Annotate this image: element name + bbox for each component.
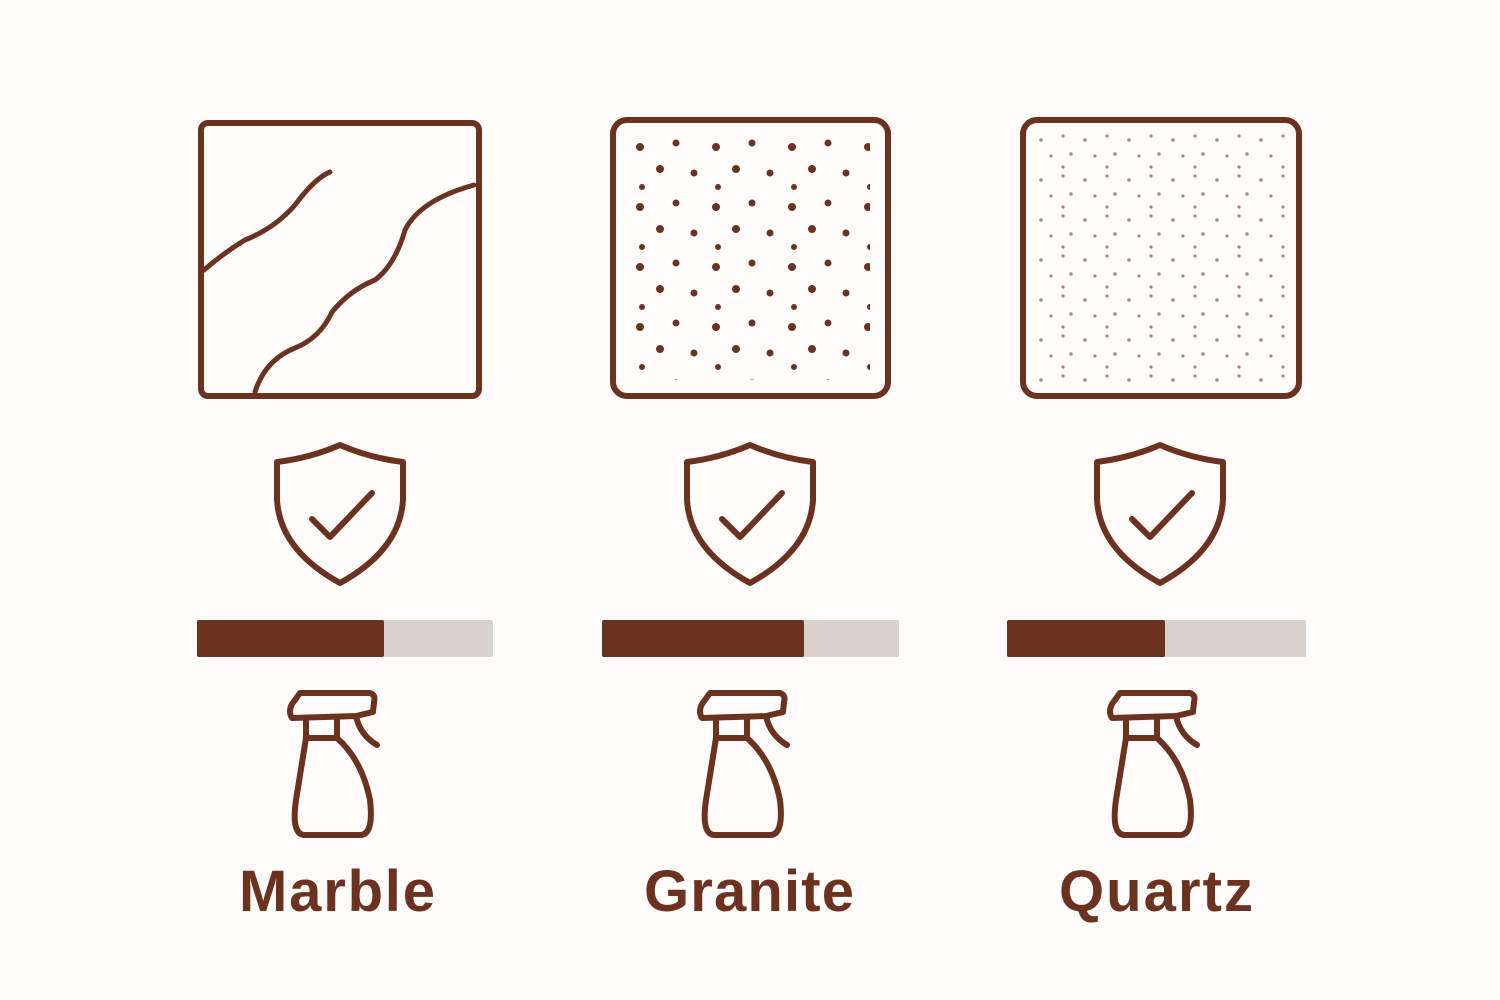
granite tile — [613, 120, 888, 396]
icon: shield check — [277, 445, 403, 583]
panel: marble — [197, 123, 493, 924]
icon: spray bottle — [700, 693, 787, 835]
panel: quartz — [1007, 120, 1306, 924]
icon: shield check — [1097, 445, 1223, 583]
panel: granite — [602, 120, 899, 924]
bar: marble — [197, 620, 493, 657]
icon: spray bottle — [1110, 693, 1197, 835]
marble tile — [201, 123, 479, 396]
icon: spray bottle — [290, 693, 377, 835]
label: Granite: Granite — [644, 859, 854, 924]
label: Quartz: Quartz — [1059, 859, 1253, 924]
label: Marble: Marble — [239, 859, 435, 924]
quartz tile — [1023, 120, 1299, 396]
icon: shield check — [687, 445, 813, 583]
bar: quartz — [1007, 620, 1306, 657]
bar: granite — [602, 620, 899, 657]
